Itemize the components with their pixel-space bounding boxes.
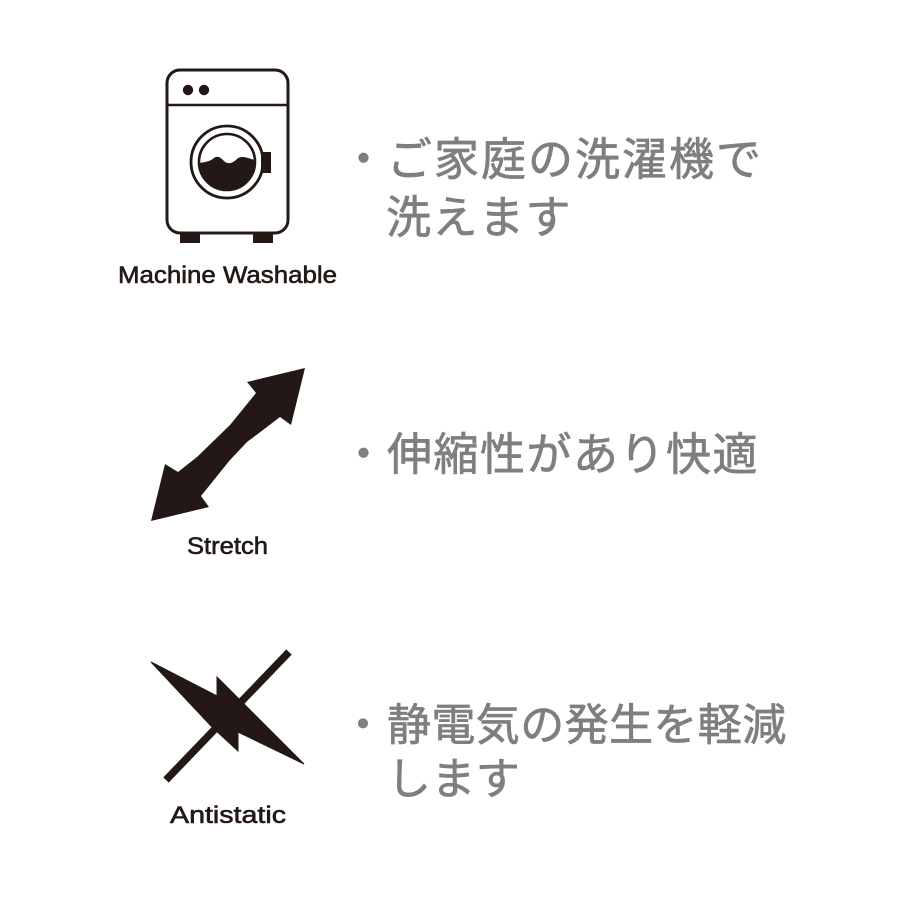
- bullet text: machine washable: 洗えます: [386, 192, 572, 243]
- bullet text: machine washable: ご家庭の洗濯機で: [387, 134, 763, 185]
- bullet text: antistatic: 静電気の発生を軽減: [387, 701, 787, 750]
- bullet text: stretch: ・: [341, 429, 388, 480]
- label: Machine Washable: Machine Washable: [118, 262, 337, 289]
- icon: stretch arrow: [151, 368, 305, 521]
- bullet text: antistatic: [341, 701, 787, 804]
- label: Stretch: Stretch: [187, 533, 268, 560]
- bullet text: stretch: 伸縮性があり快適: [387, 429, 759, 480]
- bullet text: antistatic: します: [387, 755, 520, 804]
- bullet text: antistatic: ・: [341, 701, 385, 750]
- bullet text: machine washable: ・: [341, 134, 388, 185]
- bullet text: machine washable: [341, 134, 763, 243]
- icon: washing machine: [167, 70, 288, 243]
- label: Antistatic: Antistatic: [170, 802, 286, 829]
- icon: antistatic bolt crossed by line: [151, 652, 304, 780]
